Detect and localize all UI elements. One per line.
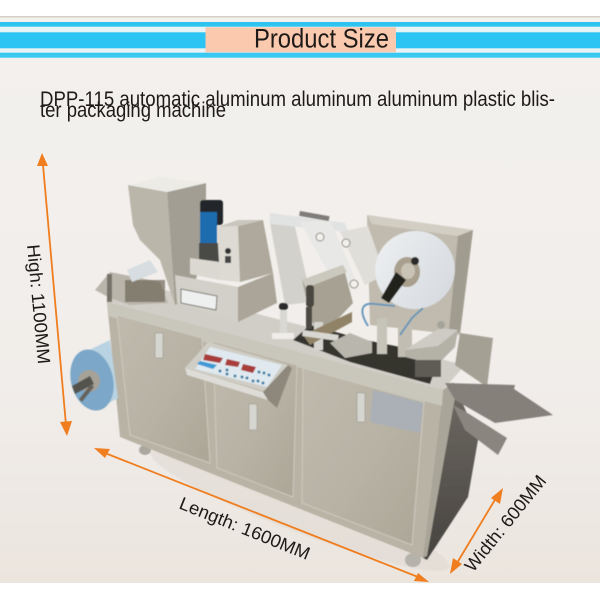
heading: Product Size: Product Size [254,24,389,54]
cutting station [405,321,458,377]
control box [217,220,273,282]
post knob [272,303,294,339]
hopper [128,177,206,305]
dark work area [293,325,440,384]
sealing plates [330,318,412,358]
rear left sealing unit [95,260,168,305]
floor shadow [143,432,457,588]
roll hub [381,257,420,303]
label: height: High: 1100MM [23,244,54,365]
lower housing [175,258,277,322]
arrow: height [37,153,72,436]
arrow: width [450,488,503,574]
door: middle [213,341,297,497]
discharge chute [445,333,553,455]
back frame with roll [270,211,473,335]
door handles [155,333,365,430]
door: left [117,315,210,463]
aluminium roll [366,222,464,318]
display panel face [195,347,282,387]
subtitle text: ter packaging machine [40,99,226,122]
subtitle text [40,88,555,122]
left film roll [64,340,120,415]
arrow: length [94,448,429,582]
cabinet front [107,302,443,558]
control panel [185,342,292,408]
label: width: Width: 600MM [461,471,550,576]
motor [199,200,223,267]
door: right [302,368,424,545]
nameplate [370,390,423,433]
header banner [0,16,600,58]
film strips and rollers [270,211,385,305]
side panel [423,385,478,560]
air tubes [362,304,423,335]
forming station [302,265,353,350]
table surface [107,290,465,390]
machine photo illustration [64,177,553,588]
label: length: Length: 1600MM [177,493,313,564]
casters [139,445,421,567]
